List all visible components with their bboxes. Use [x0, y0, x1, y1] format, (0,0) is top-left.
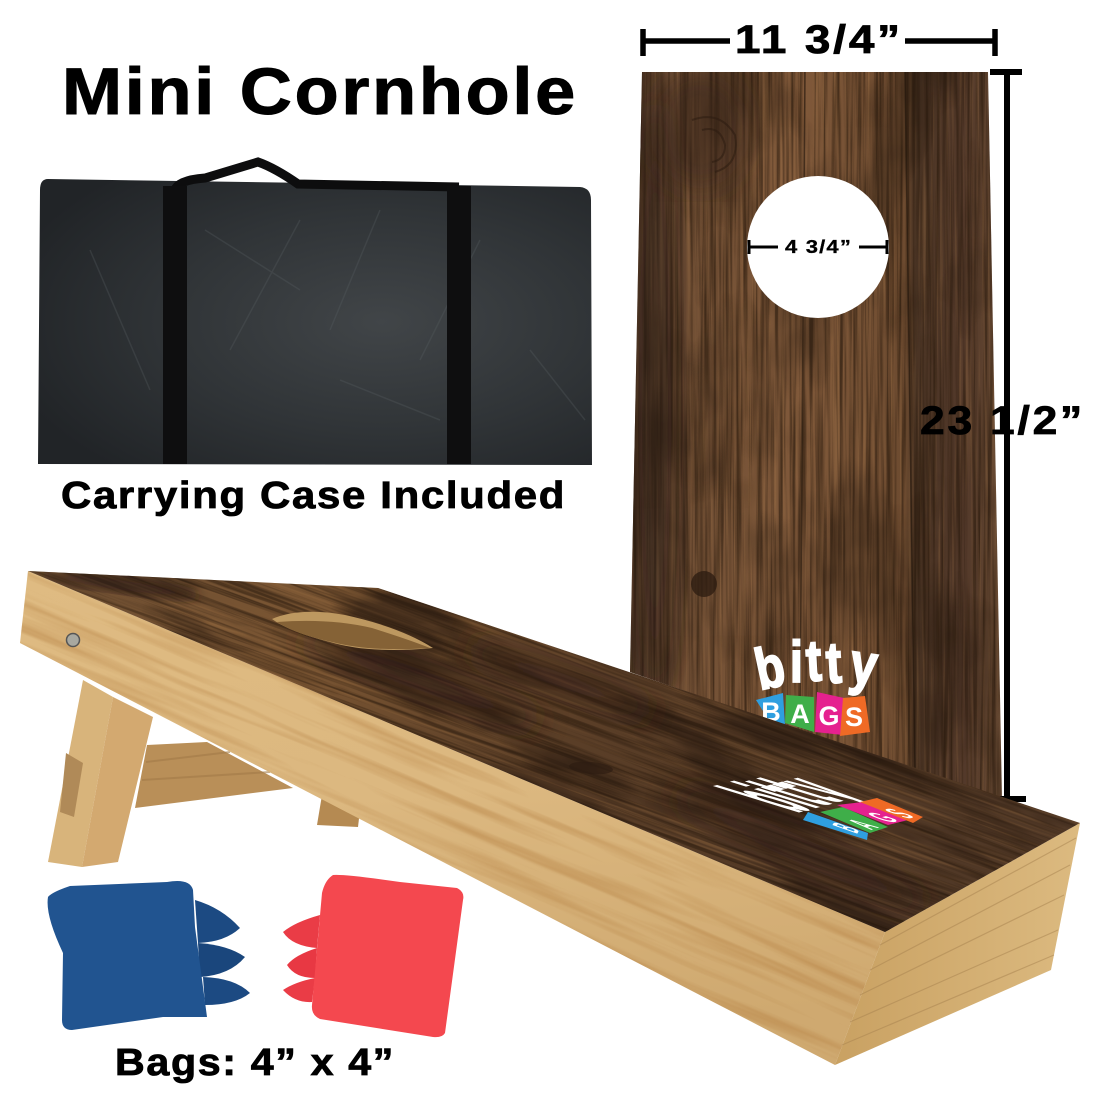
- top handle strap: [175, 162, 459, 190]
- board hole: [272, 612, 433, 650]
- carrying case caption: Carrying Case Included: [61, 475, 566, 517]
- height label: 23 1/2”: [920, 399, 1085, 443]
- logo: bitty bags on flat board: bitty: [693, 765, 888, 821]
- logo: bitty bags on flat board: [693, 765, 923, 840]
- hole: [747, 176, 889, 318]
- logo: bitty bags upright: y: [846, 631, 882, 699]
- logo: bitty bags upright: [749, 628, 882, 736]
- bolt: [66, 634, 80, 646]
- title: Mini Cornhole: [62, 54, 578, 128]
- logo: bitty bags upright: t: [824, 630, 843, 696]
- hole dimension: [749, 236, 887, 257]
- flat board end: [835, 823, 1080, 1065]
- logo: bitty bags upright: S: [845, 702, 863, 732]
- logo: bitty bags on flat board: G: [858, 809, 909, 826]
- logo: bitty bags upright: i: [790, 630, 803, 695]
- logo: bitty bags on flat board: B: [824, 819, 867, 837]
- far leg behind flat board: [317, 795, 360, 827]
- logo: bitty bags upright: A: [790, 699, 810, 729]
- front leg: [48, 680, 153, 867]
- logo: bitty bags on flat board: A: [839, 816, 888, 833]
- logo: bitty bags upright: t: [804, 628, 823, 694]
- hole dimension: 4 3/4”: [785, 236, 852, 257]
- width dimension: 11 3/4”: [735, 18, 903, 62]
- flat board top: [28, 571, 1080, 932]
- carrying case: [38, 162, 592, 465]
- logo: bitty bags on flat board: S: [876, 805, 923, 822]
- right strap: [447, 186, 471, 464]
- flat board side: [0, 558, 899, 1076]
- height dimension: [990, 72, 1026, 800]
- blue bags: [48, 881, 250, 1030]
- cross brace: [135, 742, 293, 808]
- left strap: [163, 186, 187, 464]
- logo: bitty bags upright: B: [761, 697, 781, 727]
- bags caption: Bags: 4” x 4”: [115, 1042, 395, 1084]
- width dimension: [643, 18, 995, 62]
- logo: bitty bags upright: b: [749, 633, 790, 703]
- red bags: [283, 875, 463, 1037]
- logo: bitty bags upright: G: [818, 701, 840, 731]
- upright board: [625, 65, 1010, 805]
